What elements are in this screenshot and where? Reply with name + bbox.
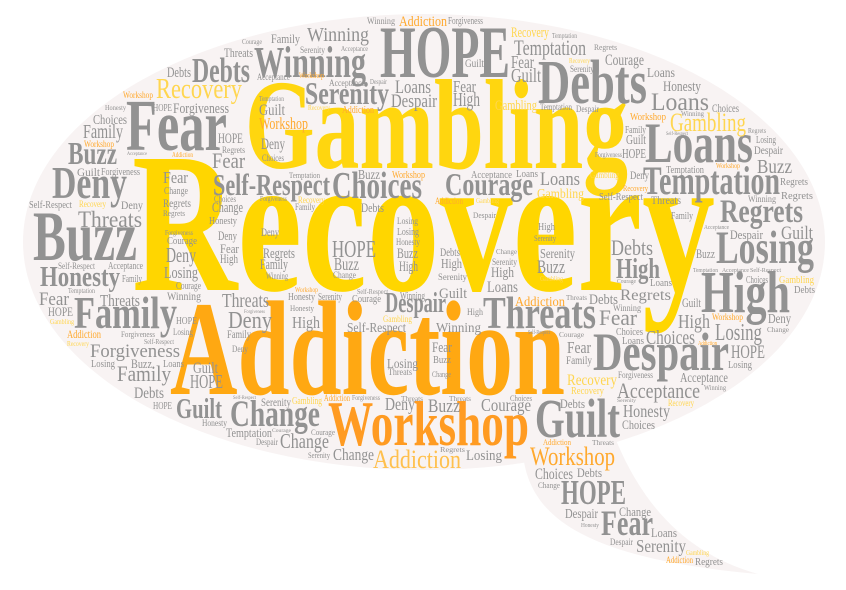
small grey words: Regrets [222,145,245,155]
small grey words: Temptation [666,165,704,176]
large grey words: Family [74,287,177,338]
small grey words: Despair [370,78,388,86]
large grey words: Despair [593,322,729,382]
small grey words: Acceptance [127,152,148,157]
small grey words: Deny [218,228,237,243]
small grey words: Serenity [534,234,556,243]
small grey words: Debts [134,385,164,402]
small grey words: Losing [397,226,419,238]
small grey words: Threats [592,439,614,447]
small grey words: Buzz [428,396,460,417]
small grey words: Debts [167,65,191,81]
small grey words: Regrets [780,176,808,188]
orange words: Workshop [712,312,743,322]
small grey words: Change [333,445,374,464]
yellow words: Recovery [571,386,604,397]
small grey words: Acceptance [680,371,728,386]
small grey words: Buzz [433,354,451,366]
small grey words: Despair [576,104,599,114]
large grey words: Threats [483,288,596,338]
small grey words: Acceptance [704,225,729,231]
small grey words: Threats [224,45,253,60]
small grey words: Despair [610,537,633,547]
small grey words: Choices [622,417,655,432]
small grey words: Loans [622,336,644,347]
small grey words: HOPE [176,315,197,327]
orange words: Workshop [716,162,740,170]
large grey words: Debts [611,235,653,260]
large grey words: Loans [645,112,753,175]
small grey words: Forgiveness [352,394,380,402]
large grey words: High [616,254,660,285]
small grey words: Losing [164,263,198,282]
small grey words: Loans [395,77,431,98]
small grey words: Threats [78,207,142,232]
large grey words: Serenity [636,536,686,556]
small grey words: Family [122,274,142,285]
orange words: Addiction [399,14,447,30]
small grey words: Winning [681,110,704,118]
small grey words: Debts [794,284,815,296]
small grey words: Choices [712,101,739,115]
orange words: Addiction [543,438,571,447]
small grey words: Threats [566,294,587,302]
large grey words: Guilt [535,388,620,449]
small grey words: Serenity [261,395,291,409]
small grey words: Debts [577,465,602,480]
small grey words: Forgiveness [618,370,653,380]
small grey words: Self-Respect [58,261,95,271]
small grey words: Debts [560,396,585,411]
small grey words: Deny [166,243,196,267]
small grey words: Buzz [131,356,152,371]
orange words: Workshop [295,286,318,294]
small grey words: Self-Respect [599,191,643,203]
small grey words: Family [671,210,693,222]
yellow words: Gambling [779,274,814,286]
small grey words: Forgiveness [595,151,622,159]
small grey words: Forgiveness [121,330,155,339]
small grey words: Choices [746,275,768,286]
small grey words: Winning [613,303,641,313]
large grey words: Acceptance [617,378,700,403]
yellow words: Gambling [495,98,537,114]
small grey words: Honesty [105,104,126,112]
small grey words: Forgiveness [260,195,287,203]
large grey words: Debts [192,51,250,90]
small grey words: Fear [212,148,246,173]
large grey words: HOPE [561,473,626,512]
small grey words: HOPE [218,131,243,147]
small grey words: Choices [93,113,127,128]
yellow words: Gambling [686,549,709,557]
orange words: Addiction [324,393,350,403]
large grey words: HOPE [380,12,510,94]
small grey words: Self-Respect [144,338,174,346]
small grey words: Self-Respect [666,132,689,137]
small grey words: Self-Respect [29,199,72,211]
large grey words: Regrets [720,194,803,230]
yellow words: Gambling [50,318,74,326]
small grey words: Courage [481,395,531,415]
small grey words: Acceptance [722,268,749,274]
small grey words: Change [212,200,243,216]
small grey words: Family [271,31,300,46]
small grey words: Deny [228,308,272,334]
small grey words: Threats [401,395,423,403]
small grey words: Regrets [594,43,617,52]
small grey words: Guilt [511,65,541,87]
yellow words: Recovery [79,199,106,209]
small grey words: Regrets [781,190,813,202]
small grey words: Winning [704,384,726,392]
large grey words: Self-Respect [213,167,330,202]
small grey words: Acceptance [341,45,368,53]
orange words: Addiction [373,445,461,474]
small grey words: Honesty [288,292,315,303]
small grey words: Regrets [748,127,766,135]
small grey words: HOPE [731,342,765,363]
small grey words: Temptation [514,35,586,60]
large grey words: Guilt [176,393,222,425]
small grey words: Temptation [259,95,284,103]
small grey words: Regrets [263,246,295,262]
orange words: Workshop [259,114,308,133]
small grey words: Forgiveness [244,310,265,315]
small grey words: Deny [232,344,248,354]
small grey words: Courage [176,281,201,292]
small grey words: Buzz [358,168,380,183]
small grey words: HOPE [153,400,172,412]
small grey words: Fear [163,168,188,187]
small grey words: Losing [728,360,752,371]
yellow words: Recovery [567,372,617,389]
orange words: Addiction [342,105,374,116]
small grey words: Serenity [318,292,342,303]
small grey words: Despair [256,437,278,447]
small grey words: Change [619,504,651,519]
small grey words: Despair [473,211,496,220]
yellow words: Recovery [569,57,590,65]
small grey words: Losing [91,358,115,370]
small grey words: Choices [510,394,532,403]
orange words: Workshop [530,442,615,471]
orange words: Addiction [67,327,101,341]
large grey words: Buzz [68,135,117,171]
small grey words: Debts [589,292,618,308]
small grey words: High [441,257,462,272]
yellow words: Gambling [383,314,412,324]
small grey words: Fear [432,340,452,356]
small grey words: Choices [262,153,284,163]
small grey words: Forgiveness [173,101,229,117]
yellow words: Recovery [67,340,89,348]
small grey words: Acceptance [257,72,290,82]
small grey words: Losing [756,135,776,146]
small grey words: Regrets [620,287,671,304]
small grey words: Temptation [540,102,572,112]
small grey words: Family [625,125,646,136]
orange words: Addiction [172,151,193,159]
small grey words: Acceptance [108,261,143,272]
small grey words: High [399,259,418,275]
small grey words: Temptation [226,425,272,440]
small grey words: Temptation [289,171,320,180]
small grey words: Self-Respect [528,329,550,336]
small grey words: Despair [565,507,598,522]
small grey words: Deny [630,168,649,182]
small grey words: Family [566,353,592,367]
small grey words: Choices [535,466,573,483]
small grey words: Losing [466,448,502,464]
small grey words: Threats [388,367,412,377]
large grey words: Deny [52,157,127,208]
small grey words: Temptation [693,268,718,274]
small grey words: Courage [352,293,381,305]
large grey words: Serenity [305,75,389,111]
orange words: Addiction [435,196,463,206]
orange words: Workshop [299,71,324,80]
small grey words: Guilt [465,56,485,70]
yellow words: Gambling [590,170,619,180]
yellow words: Recovery [298,195,325,205]
small grey words: Choices [214,194,236,204]
small grey words: Fear [39,289,70,310]
small grey words: Debts [440,245,460,259]
small grey words: High [453,89,480,111]
orange words: Workshop [392,170,425,181]
small grey words: Threats [651,193,681,207]
small grey words: High [538,221,555,233]
orange words [67,14,743,565]
small grey words: Courage [617,279,636,285]
large grey words: Winning [254,38,366,87]
small grey words: Honesty [290,304,314,313]
small grey words: Guilt [439,286,468,302]
small grey words: Honesty [209,215,237,227]
small grey words: Change [496,248,517,256]
small grey words: Losing [397,216,418,226]
small grey words: Family [227,327,251,341]
small grey words: Fear [511,52,534,72]
small grey words: HOPE [153,102,172,114]
small grey words: Threats [449,395,471,403]
small grey words: Loans [650,277,672,289]
small grey words: Choices [616,327,643,338]
small grey words: Despair [730,227,764,242]
small grey words: Buzz [537,257,565,278]
small grey words: Forgiveness [448,16,483,27]
small grey words: Self-Respect [347,321,406,336]
small grey words: Serenity [492,257,517,267]
small grey words: Buzz [757,156,792,178]
large grey words: Debts [538,49,647,117]
small grey words: Regrets [440,446,465,454]
small grey words: Deny [261,136,285,153]
small grey words: Guilt [781,223,814,244]
small grey words: Winning [167,289,201,303]
small grey words: Winning [367,16,395,26]
small grey words: Fear [567,338,591,357]
large grey words: Honesty [40,261,120,293]
small grey words: Fear [599,305,638,330]
small grey words: Serenity [308,451,330,460]
small grey words: High [491,265,514,281]
small grey words: High [292,313,320,332]
small grey words: Self-Respect [357,288,388,296]
small grey words: Honesty [202,418,227,428]
small grey words: Honesty [663,79,701,95]
small grey words: Fear [220,241,240,256]
small grey words: Courage [559,331,584,339]
small grey words: Winning [436,321,481,336]
small grey words: Family [295,202,315,212]
small grey words: Courage [605,52,644,69]
small grey words: Loans [540,169,580,190]
small grey words: Courage [242,38,262,46]
small grey words: Fear [453,77,476,96]
small grey words: Despair [754,143,783,157]
small grey words: Loans [487,279,518,296]
small grey words: Loans [516,168,538,180]
yellow words: Gambling [670,108,746,137]
small grey words: Guilt [193,360,218,377]
small grey words: Serenity [540,247,575,262]
large grey words: Fear [601,503,653,543]
small grey words: Courage [311,428,335,437]
small grey words: Guilt [77,165,101,179]
orange words: Addiction [515,295,565,310]
small grey words: Deny [768,312,791,327]
small grey words: Winning [266,271,288,281]
small grey words: Forgiveness [90,341,180,362]
small grey words: High [220,251,238,266]
small grey words: Winning [400,291,425,302]
small grey words: HOPE [190,371,223,393]
small grey words: Courage [167,235,197,247]
small grey words: Threats [100,291,140,310]
yellow words: Gambling [540,275,563,283]
small grey words: Regrets [163,209,185,218]
small grey words: Losing [715,320,762,346]
small grey words: Deny [121,198,143,212]
small grey words: Threats [222,290,269,312]
orange words: Workshop [630,111,666,123]
large grey words: HOPE [332,237,376,263]
small grey words: Serenity [570,64,594,74]
small grey words: Temptation [68,287,95,295]
orange words: Workshop [123,90,153,100]
small grey words: Guilt [259,102,285,119]
word: Addiction: Addiction [170,275,565,424]
small grey words: Family [83,121,123,143]
small grey words: Winning [748,194,776,204]
small grey words: Self-Respect [750,267,781,274]
small grey words: Family [260,257,288,273]
small grey words: Change [538,481,560,490]
small grey words: Self-Respect [233,396,257,401]
large grey words: High [701,259,790,325]
yellow words: Recovery [308,104,330,112]
small grey words: Change [164,186,188,197]
small grey words: Family [117,361,171,386]
small grey words: HOPE [48,304,73,319]
small grey words: Change [432,370,451,379]
large grey words: Despair [385,288,446,319]
large grey words: Buzz [33,198,137,276]
small grey words: Serenity [300,45,325,55]
small grey words: Loans [651,525,677,540]
small grey words: Honesty [396,237,420,247]
small grey words: Change [767,326,789,334]
small grey words: Forgiveness [165,229,193,237]
small grey words: Losing [387,357,418,372]
small grey words: Deny [261,225,279,239]
word: Workshop: Workshop [328,389,529,459]
yellow words: Gambling [476,197,499,205]
yellow words: Recovery [156,74,242,105]
small grey words: Serenity [438,272,467,282]
yellow words: Recovery [668,398,694,408]
large grey words: Winning [307,24,369,46]
small grey words: Serenity [617,399,637,404]
small grey words: Despair [391,91,438,112]
small grey words: High [678,311,710,333]
small grey words: Loans [651,89,709,116]
small grey words: Regrets [695,557,723,568]
small grey words: Change [280,429,329,453]
small grey words: Honesty [581,523,599,529]
large grey words: Temptation [643,158,780,203]
small grey words: Honesty [623,401,670,421]
small grey words: Losing [173,327,193,337]
small grey words: High [467,307,483,317]
small grey words: Guilt [626,133,646,148]
small grey words: Acceptance [471,169,512,181]
orange words: Recovery [623,184,648,193]
small grey words: Deny [385,394,415,414]
small grey words: Debts [361,200,384,215]
yellow words: Gambling [537,187,584,202]
small grey words: Temptation [552,32,577,40]
large grey words: Change [230,394,320,435]
large grey words: Fear [126,85,227,166]
small grey words: Regrets [163,196,191,210]
word: Gambling: Gambling [245,54,628,196]
small grey words: Buzz [696,246,715,261]
small grey words: Acceptance [329,78,365,88]
small grey words: Loans [647,66,675,81]
large grey words: Courage [445,166,533,202]
small grey words: HOPE [622,147,646,162]
yellow words: Gambling [292,395,322,407]
orange words: Workshop [84,139,114,149]
small grey words: Buzz [334,254,359,274]
yellow words: Recovery [511,25,549,41]
large grey words: Choices [332,165,422,207]
orange words: Addiction [666,555,693,565]
small grey words: Courage [272,429,292,434]
small grey words: Forgiveness [101,166,140,178]
small grey words: Loans [163,359,184,370]
orange words: Addiction [698,341,717,347]
small grey words: Buzz [397,246,418,262]
small grey words: Change [333,270,356,280]
small grey words: Choices [646,327,695,349]
small grey words: Guilt [682,295,701,310]
